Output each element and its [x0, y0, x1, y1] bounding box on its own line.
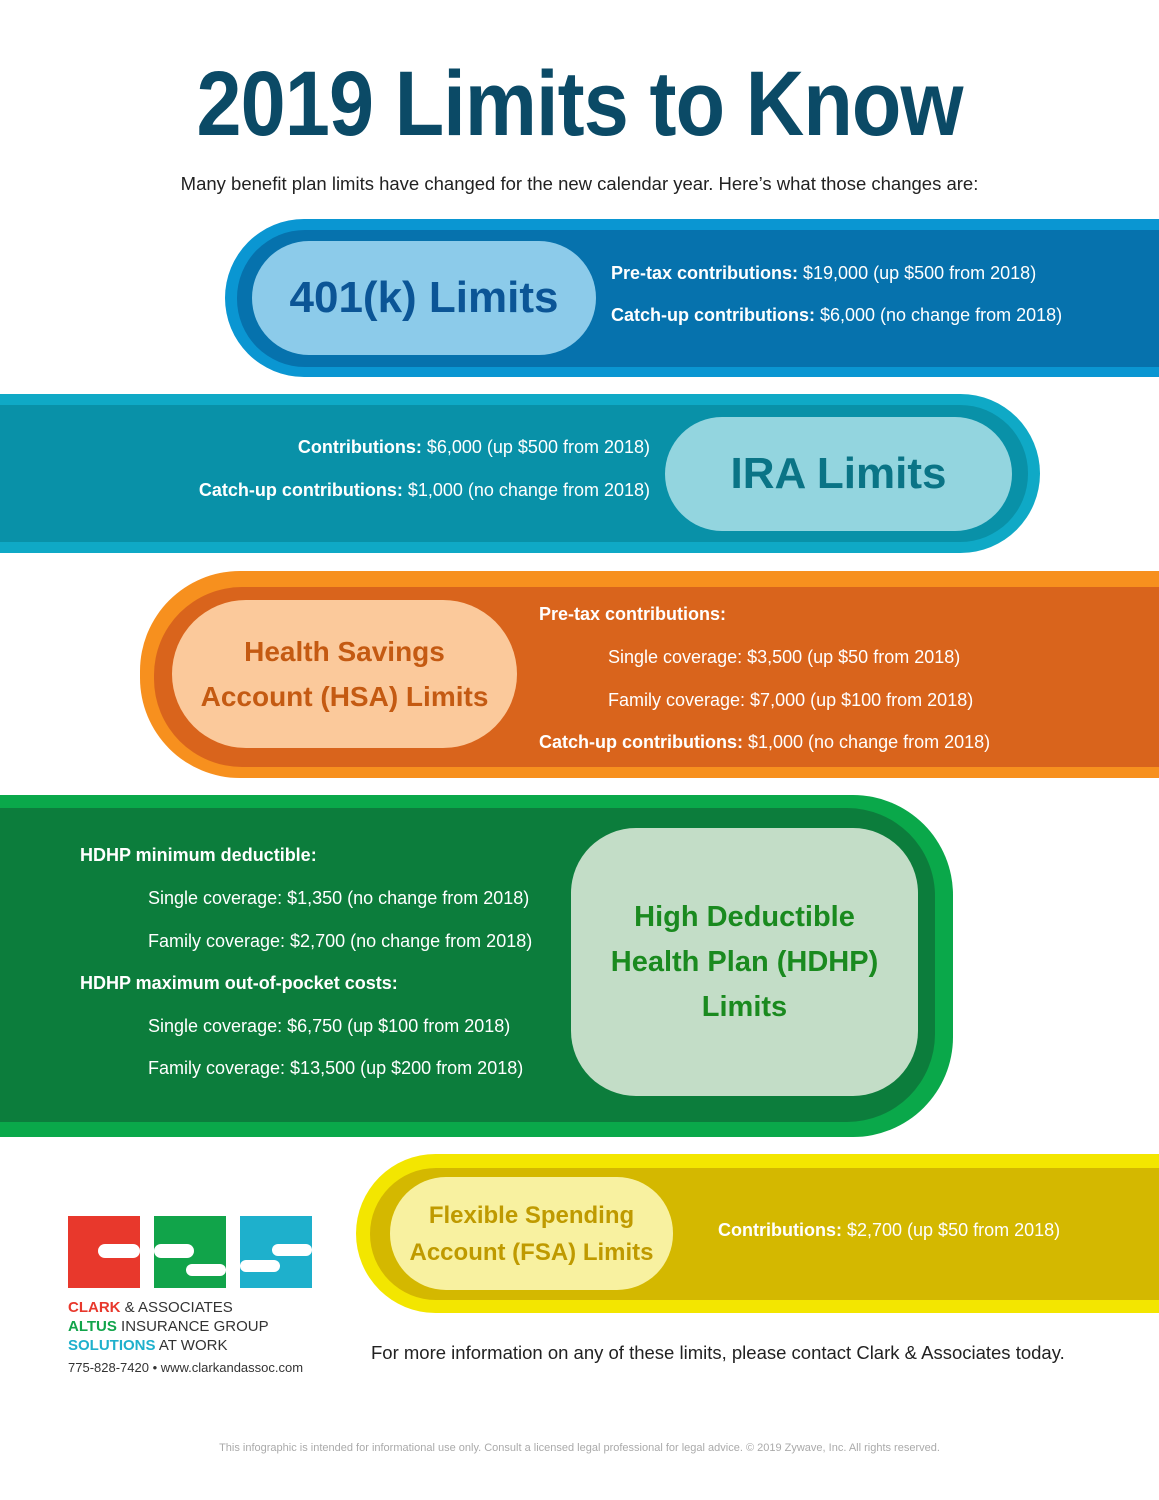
title: 2019 Limits to Know [197, 53, 963, 155]
panel: HDHP: Family coverage: $13,500 (up $200 from 2018) [148, 1058, 523, 1078]
panel: HSA: Catch-up contributions: $1,000 (no change from 2018) [539, 732, 990, 752]
pill: 401k title [252, 241, 596, 355]
panel: HSA [140, 571, 1159, 778]
text: logo lines [68, 1299, 303, 1375]
panel: HDHP: Single coverage: $1,350 (no change from 2018) [148, 888, 529, 908]
text: logo lines: SOLUTIONS AT WORK [68, 1337, 227, 1354]
text: HSA details: Pre-tax contributions: [539, 604, 726, 624]
panel: 401k [225, 219, 1159, 377]
icon: logo blocks [68, 1216, 312, 1288]
panel: IRA: Catch-up contributions: $1,000 (no change from 2018) [199, 480, 650, 500]
pill: FSA title [390, 1177, 673, 1290]
text: logo lines: 775-828-7420 • www.clarkandassoc.com [68, 1360, 303, 1375]
panel: 401k: Catch-up contributions: $6,000 (no change from 2018) [611, 305, 1062, 325]
pill: HSA title: Health Savings [244, 636, 445, 667]
pill: HSA title: Account (HSA) Limits [201, 681, 488, 712]
logo [68, 1216, 312, 1375]
text: IRA details: Contributions: $6,000 (up $500 from 2018) [298, 437, 650, 457]
pill: HDHP title: Limits [702, 990, 787, 1022]
text: logo lines: CLARK & ASSOCIATES [68, 1299, 233, 1316]
pill: FSA title: Account (FSA) Limits [410, 1238, 654, 1266]
subtitle: Many benefit plan limits have changed for the new calendar year. Here’s what those changes are: [181, 173, 978, 194]
text: logo lines: ALTUS INSURANCE GROUP [68, 1318, 269, 1335]
footer disclaimer: This infographic is intended for informational use only. Consult a licensed legal professional for legal advice. © 2019 Zywave, Inc. All rights reserved. [219, 1442, 940, 1454]
panel: HDHP: Single coverage: $6,750 (up $100 from 2018) [148, 1016, 510, 1036]
panel: HSA: Family coverage: $7,000 (up $100 from 2018) [608, 690, 973, 710]
text: contact: For more information on any of these limits, please contact Clark & Associates today. [371, 1342, 1065, 1363]
panel: HSA: Single coverage: $3,500 (up $50 from 2018) [608, 647, 960, 667]
pill: IRA title: IRA Limits [731, 449, 946, 498]
pill: HDHP title: Health Plan (HDHP) [611, 946, 878, 978]
pill: 401k title: 401(k) Limits [290, 273, 558, 322]
pill: HDHP title: High Deductible [634, 900, 855, 932]
text: 401k details: Pre-tax contributions: $19,000 (up $500 from 2018) [611, 263, 1036, 283]
text: HDHP details: HDHP minimum deductible: [80, 845, 317, 865]
panel: HDHP: Family coverage: $2,700 (no change from 2018) [148, 931, 532, 951]
pill: HDHP title [571, 828, 918, 1096]
pill: FSA title: Flexible Spending [429, 1202, 634, 1228]
pill: IRA title [665, 417, 1012, 531]
text: FSA details: Contributions: $2,700 (up $50 from 2018) [718, 1220, 1060, 1240]
panel: FSA [356, 1154, 1159, 1313]
panel: HDHP [0, 795, 953, 1137]
panel: IRA [0, 394, 1040, 553]
panel: HDHP: HDHP maximum out-of-pocket costs: [80, 973, 398, 993]
pill: HSA title [172, 600, 517, 748]
